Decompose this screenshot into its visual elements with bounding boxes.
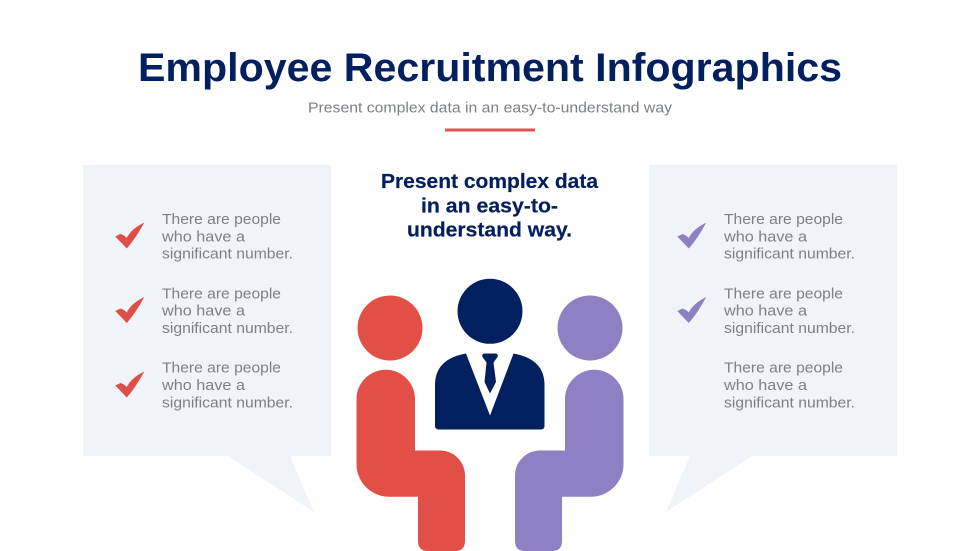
left item 1 [115, 211, 293, 263]
left item 3 text: who have a [161, 377, 246, 394]
left item 2 [115, 285, 293, 337]
center heading: understand way. [407, 218, 572, 242]
left item 2 text: There are people [162, 285, 281, 302]
subtitle: Present complex data in an easy-to-understand way [308, 100, 673, 116]
center heading: Present complex data [381, 170, 599, 193]
left item 2 text: who have a [161, 303, 246, 320]
left item 3 text [161, 360, 293, 411]
right item 1 text: who have a [723, 228, 808, 245]
icon: navy businessman [435, 279, 544, 430]
icon: purple check [677, 222, 706, 248]
right item 2 [677, 285, 855, 337]
icon: purple seated person [515, 296, 624, 551]
icon: red check [115, 297, 144, 323]
left item 1 text: There are people [162, 211, 281, 228]
left item 3 text: There are people [162, 360, 281, 377]
right item 2 text: who have a [723, 303, 808, 320]
panel: left speech bubble [83, 165, 331, 512]
icon: red seated person [356, 296, 465, 551]
center heading [381, 170, 599, 242]
right item 3 text [723, 360, 855, 411]
right item 1 text [723, 211, 855, 263]
left bubble background [83, 165, 331, 512]
left item 2 text [161, 285, 293, 337]
icon: purple check [677, 297, 706, 323]
right item 1 [677, 211, 855, 263]
left item 3 text: significant number. [162, 394, 293, 411]
right item 1 text: There are people [724, 211, 843, 228]
right item 2 text: significant number. [724, 320, 855, 337]
icon: red check [115, 222, 144, 248]
left item 3 [115, 360, 293, 411]
right item 1 text: significant number. [724, 246, 855, 263]
right item 2 text: There are people [724, 285, 843, 302]
icon: red check [115, 372, 144, 398]
right item 3 text: who have a [723, 377, 808, 394]
right item 3 text: There are people [724, 360, 843, 377]
title underline [445, 128, 535, 132]
right item 3 text: significant number. [724, 394, 855, 411]
title: Employee Recruitment Infographics [138, 46, 842, 90]
center heading: in an easy-to- [421, 194, 558, 218]
right item 2 text [723, 285, 855, 337]
left item 1 text [161, 211, 293, 263]
left item 1 text: significant number. [162, 246, 293, 263]
left item 2 text: significant number. [162, 320, 293, 337]
right bubble background [649, 165, 897, 512]
left item 1 text: who have a [161, 228, 246, 245]
panel: right speech bubble [649, 165, 897, 512]
